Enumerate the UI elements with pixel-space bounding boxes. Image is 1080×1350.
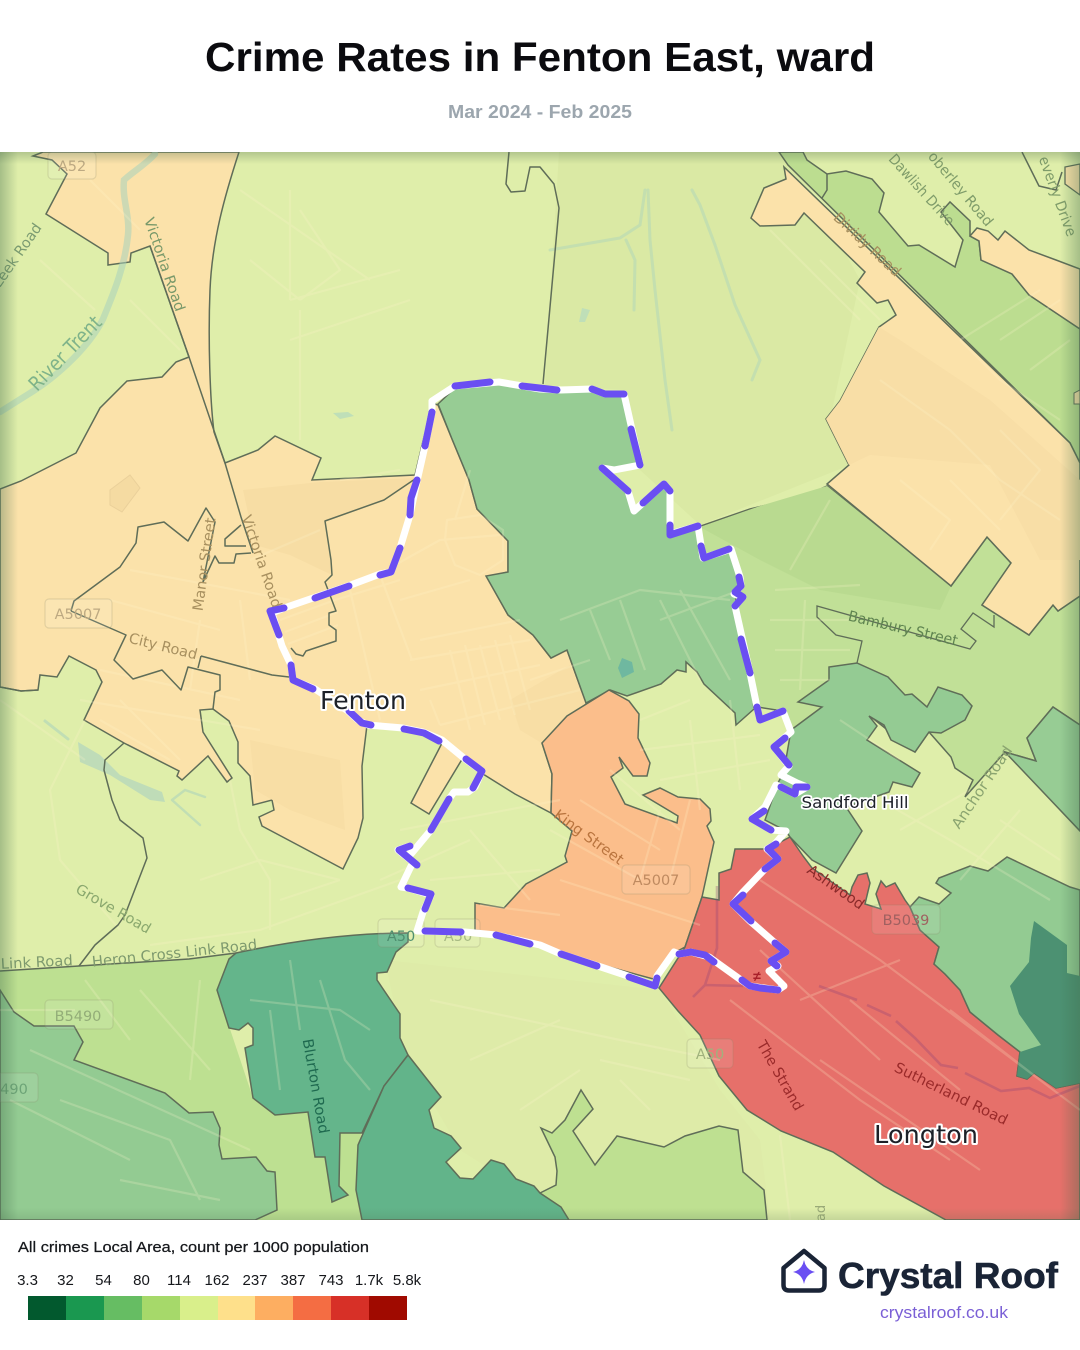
place label: Longton: Longton	[874, 1120, 978, 1149]
river and water	[0, 154, 760, 825]
road shield labels: A50	[444, 929, 472, 945]
region: green far east	[910, 857, 1080, 1088]
subtitle: date range: Mar 2024 - Feb 2025	[448, 101, 632, 122]
legend value labels: 162	[204, 1272, 230, 1289]
street name labels: Manor Street	[191, 516, 220, 612]
legend value labels: 1.7k	[355, 1272, 384, 1289]
region: green Sandford Hill	[765, 663, 972, 873]
logo: Crystal Roof	[784, 1251, 1059, 1322]
region: tan west and Fenton	[0, 152, 586, 869]
pond in ward	[618, 658, 634, 678]
internal ward boundaries	[0, 152, 1062, 971]
street name labels: ad	[814, 1205, 829, 1221]
region: red Longton	[659, 837, 1080, 1220]
railway station symbol: ≠	[753, 968, 761, 984]
street name labels: Dawlish Drive	[885, 152, 957, 229]
road shield labels: B5490	[55, 1009, 101, 1025]
railway lines	[693, 886, 1080, 1098]
streets	[0, 180, 1080, 1220]
legend value labels: 32	[57, 1272, 74, 1289]
street name labels: Sutherland Road	[892, 1060, 1010, 1129]
legend value labels: 5.8k	[393, 1272, 422, 1289]
street name labels: Link Road	[0, 953, 73, 973]
legend value labels: 54	[95, 1272, 112, 1289]
road shield labels: 490	[0, 1082, 28, 1098]
legend value labels: 743	[318, 1272, 344, 1289]
street name labels: Ashwood	[804, 862, 867, 913]
region: tan corner	[1065, 164, 1080, 195]
road shields	[0, 152, 940, 1102]
road shield labels: B5039	[883, 913, 929, 929]
region: dark green south of Blurton	[356, 1055, 569, 1220]
street name labels: River Trent	[23, 311, 107, 396]
region: tan far north-east	[970, 228, 1080, 329]
legend colour scale	[28, 1296, 407, 1320]
icon: house with star	[784, 1251, 824, 1290]
region: mid green north-east	[779, 152, 1080, 463]
ward boundary: white line with purple dashes	[270, 382, 807, 990]
road shield labels: A50	[387, 929, 415, 945]
choropleth map panel	[0, 149, 1080, 1221]
legend title: All crimes Local Area, count per 1000 population	[18, 1239, 369, 1256]
road shield labels: A50	[696, 1047, 724, 1063]
street name labels	[0, 149, 1079, 1221]
region: mid green east	[698, 486, 1080, 797]
legend value labels: 387	[280, 1272, 306, 1289]
street name labels: City Road	[127, 631, 199, 663]
region: dark green Anchor patch	[1005, 707, 1080, 831]
street name labels: everly Drive	[1035, 154, 1079, 239]
legend value labels: 237	[242, 1272, 268, 1289]
road shield labels	[0, 159, 929, 1098]
logo url: crystalroof.co.uk	[880, 1304, 1009, 1322]
place label: Sandford Hill: Sandford Hill	[802, 793, 908, 812]
title: Crime Rates in Fenton East, ward	[205, 34, 875, 80]
logo wordmark: Crystal Roof	[838, 1255, 1059, 1296]
legend value labels: 3.3	[17, 1272, 38, 1289]
street name labels: Dividy Road	[830, 210, 904, 280]
region: mid green south	[540, 1090, 767, 1220]
legend	[17, 1239, 422, 1320]
region: darkest green patch	[1010, 921, 1080, 1088]
legend value labels	[17, 1272, 422, 1289]
street name labels: Anchor Road	[949, 743, 1016, 832]
street name labels: King Street	[550, 807, 626, 869]
boundary lines: Bambury Street pocket	[817, 606, 994, 663]
street name labels: Victoria Road	[237, 513, 284, 610]
street name labels: oberley Road	[924, 149, 996, 230]
road shield labels: A52	[58, 159, 86, 175]
street name labels: Grove Road	[73, 882, 153, 937]
street name labels: Bambury Street	[847, 609, 960, 650]
region: ward green (Fenton East north)	[438, 384, 754, 725]
road shield labels: A5007	[633, 873, 679, 889]
region: tan north-east	[751, 167, 1080, 635]
road shield labels: A5007	[55, 607, 101, 623]
region: orange King Street	[475, 690, 714, 980]
region: mid green south-west	[0, 953, 361, 1220]
street name labels: Heron Cross Link Road	[91, 937, 258, 971]
map edge vignette	[0, 152, 1080, 1220]
legend value labels: 80	[133, 1272, 150, 1289]
street name labels: Blurton Road	[299, 1038, 331, 1135]
region: green south-west	[0, 990, 277, 1220]
place label: Fenton: Fenton	[320, 686, 406, 715]
region: dark green Blurton	[217, 933, 408, 1202]
street name labels: Victoria Road	[140, 216, 187, 314]
legend value labels: 114	[167, 1272, 191, 1289]
street name labels: The Strand	[753, 1037, 806, 1114]
